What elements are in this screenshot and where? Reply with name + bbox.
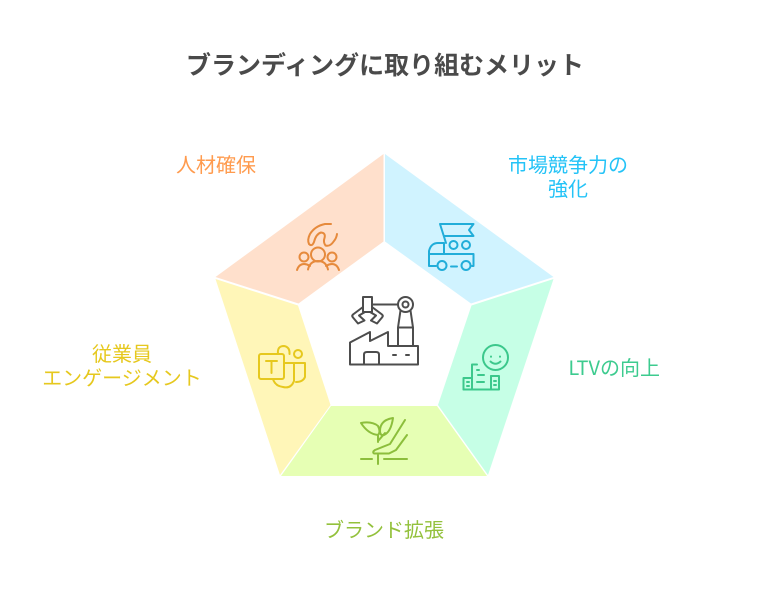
- icon: factory and robot arm: [350, 297, 418, 364]
- label: employee engagement: 従業員: [92, 343, 152, 366]
- panel: competitiveness segment: [385, 154, 554, 304]
- icon: smiling face with buildings: [464, 345, 508, 390]
- label: talent acquisition: 人材確保: [176, 154, 256, 177]
- label: employee engagement: エンゲージメント: [42, 367, 202, 390]
- panel: employee engagement segment: [216, 279, 330, 475]
- panel: talent acquisition segment: [216, 154, 384, 304]
- icon: hand holding sprout: [361, 418, 407, 464]
- label: competitiveness: 市場競争力の: [508, 154, 628, 177]
- label: LTV improvement: LTVの向上: [568, 352, 660, 381]
- label: competitiveness: 強化: [548, 178, 588, 201]
- icon: truck with flag: [429, 224, 474, 270]
- title: ブランディングに取り組むメリット: [186, 51, 584, 80]
- panel: brand extension segment: [281, 406, 487, 476]
- label: brand extension: ブランド拡張: [324, 518, 444, 542]
- icon: collaboration app with letter T: [259, 346, 305, 387]
- icon: people and hand: [297, 224, 339, 270]
- panel: LTV segment: [438, 279, 554, 475]
